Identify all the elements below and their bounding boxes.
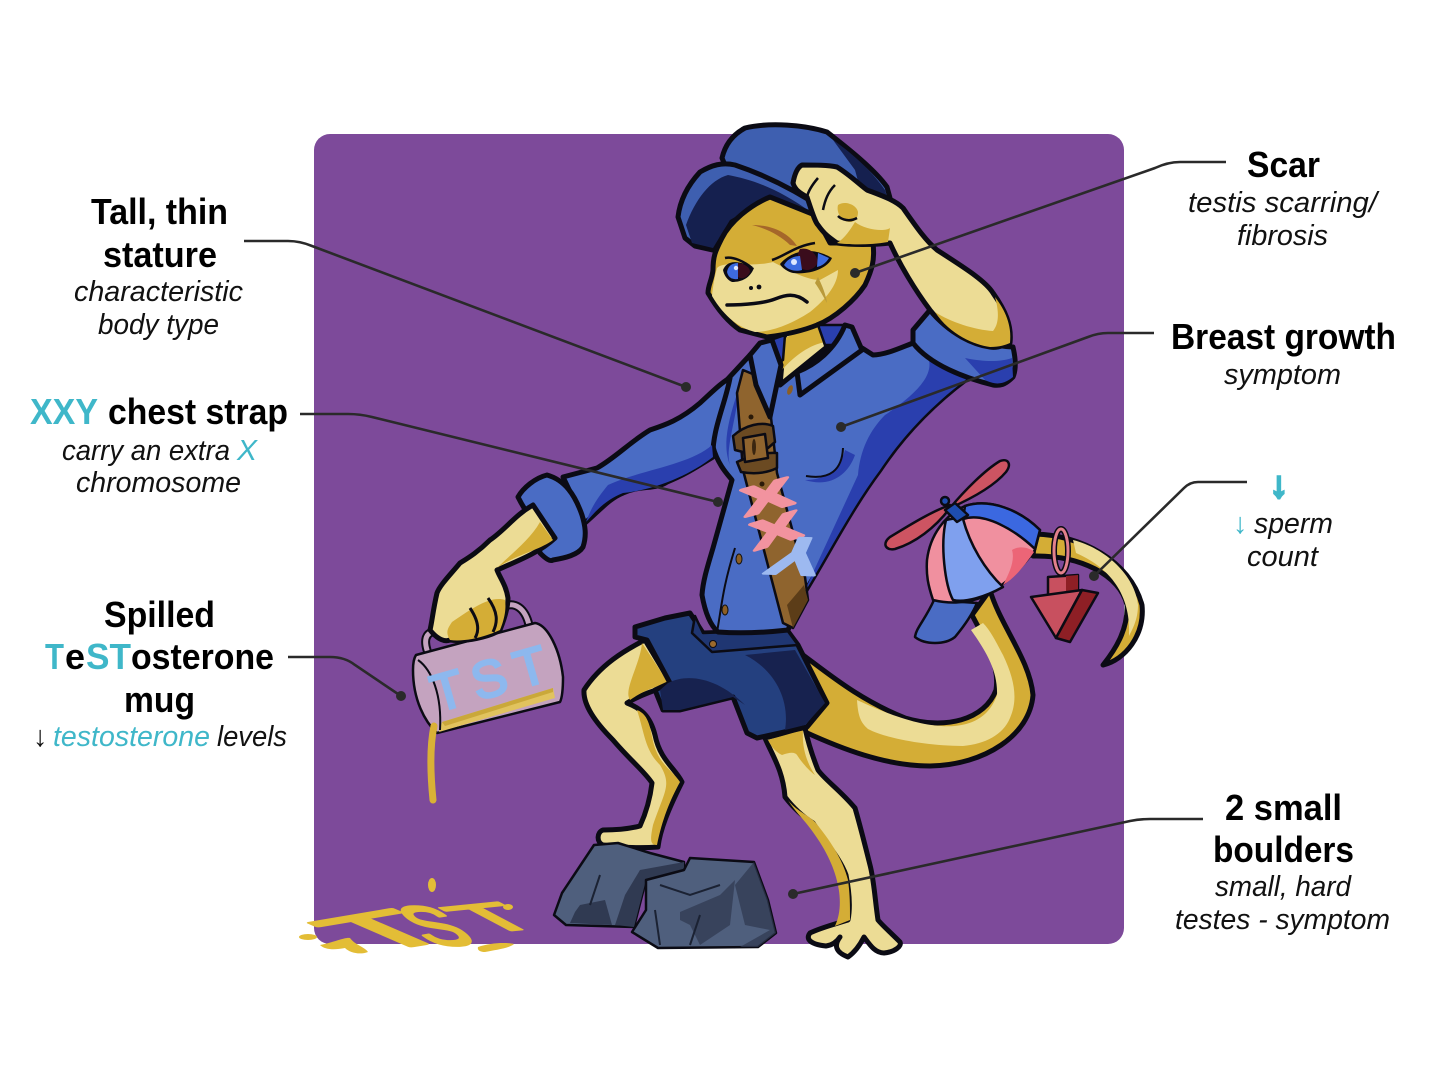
tail: upper tip [1033,534,1142,665]
shirt torso and right sleeve with strap [702,330,975,633]
left arm sleeve [518,378,730,561]
label: XXY chest strap: carry an extra [62,435,230,467]
label: tall, thin stature: characteristic [74,276,243,308]
spilled TST puddle: T [287,900,482,961]
label: spilled testosterone mug: ST [86,636,131,677]
spill droplets [299,878,514,953]
label: 2 small boulders [1175,787,1390,936]
leg: front leg and foot [765,728,900,957]
spilled TST puddle: T [424,894,561,941]
label: sperm count: ↓ [1270,464,1288,505]
label: XXY chest strap: XXY [30,391,98,432]
label: tall, thin stature: stature [103,234,217,275]
shirt buttons [736,554,742,564]
label: spilled testosterone mug: testosterone [53,721,210,753]
leader: sperm count [1089,482,1247,581]
label: breast growth [1171,316,1396,391]
label: scar [1188,144,1380,252]
rocks: two small boulders [554,843,776,948]
left hand gripping mug [430,505,555,641]
head [708,197,874,337]
label: sperm count: count [1247,541,1320,573]
label: scar: Scar [1247,144,1320,185]
nostrils [749,286,753,290]
label: scar: fibrosis [1237,220,1328,252]
label: sperm count: ↓ [1233,508,1248,540]
label: XXY chest strap: chest strap [108,391,288,432]
label: spilled testosterone mug: ↓ [33,721,48,753]
illustration: lizard character [287,125,1142,961]
label: spilled testosterone mug: osterone [131,636,274,677]
label: spilled testosterone mug [33,594,287,753]
label: sperm count: sperm [1254,508,1333,540]
leather strap [737,370,808,628]
panel: purple background [314,134,1124,944]
label: XXY chest strap: chromosome [76,467,241,499]
chest letters XXY: X [737,469,797,525]
chest letters XXY: Y [757,526,837,587]
label: tall, thin stature: Tall, thin [91,191,228,232]
shorts [635,613,827,738]
label: 2 small boulders: testes - symptom [1175,904,1390,936]
label: XXY chest strap: X [236,435,259,467]
label: 2 small boulders: boulders [1213,829,1354,870]
leg: raised left leg [584,640,682,848]
eyes [780,251,832,273]
neck and collar [750,318,862,417]
label: tall, thin stature [74,191,243,341]
label: 2 small boulders: small, hard [1215,871,1352,903]
icon: propeller cap [885,460,1040,643]
right sleeve cuff [913,310,1015,385]
mouth [727,295,807,305]
label: breast growth: symptom [1224,359,1341,391]
chest letters XXY: X [746,502,805,558]
leader: scar [850,162,1226,278]
scar on cheek [815,277,827,303]
leader: breast growth [836,333,1154,432]
spilled TST puddle: S [379,896,493,957]
cap [678,125,890,250]
icon: red weight on ring [1031,529,1098,642]
leader: tall, thin stature [244,241,691,392]
label: tall, thin stature: body type [98,309,219,341]
label: spilled testosterone mug: mug [124,679,195,720]
belt buckle [737,453,777,473]
tail: lower section [803,590,1033,766]
label: XXY chest strap [30,391,288,499]
label: 2 small boulders: 2 small [1225,787,1342,828]
label: spilled testosterone mug: Spilled [104,594,215,635]
label: sperm count [1233,464,1333,573]
right arm and fist [793,165,1010,347]
leader: XXY chest strap [300,414,723,507]
spilled TST puddle [287,894,561,961]
leader: boulders [788,819,1203,899]
label: spilled testosterone mug: levels [217,721,287,753]
leader: spilled mug [288,657,406,701]
label: breast growth: Breast growth [1171,316,1396,357]
label: spilled testosterone mug: T [45,636,64,677]
label: scar: testis scarring/ [1188,187,1380,219]
drip [431,726,434,800]
mug with TST label: TST [425,636,554,724]
chest letters XXY [737,469,837,587]
mug with TST label [413,605,563,800]
label: spilled testosterone mug: e [65,636,85,677]
shirt body [702,330,975,633]
